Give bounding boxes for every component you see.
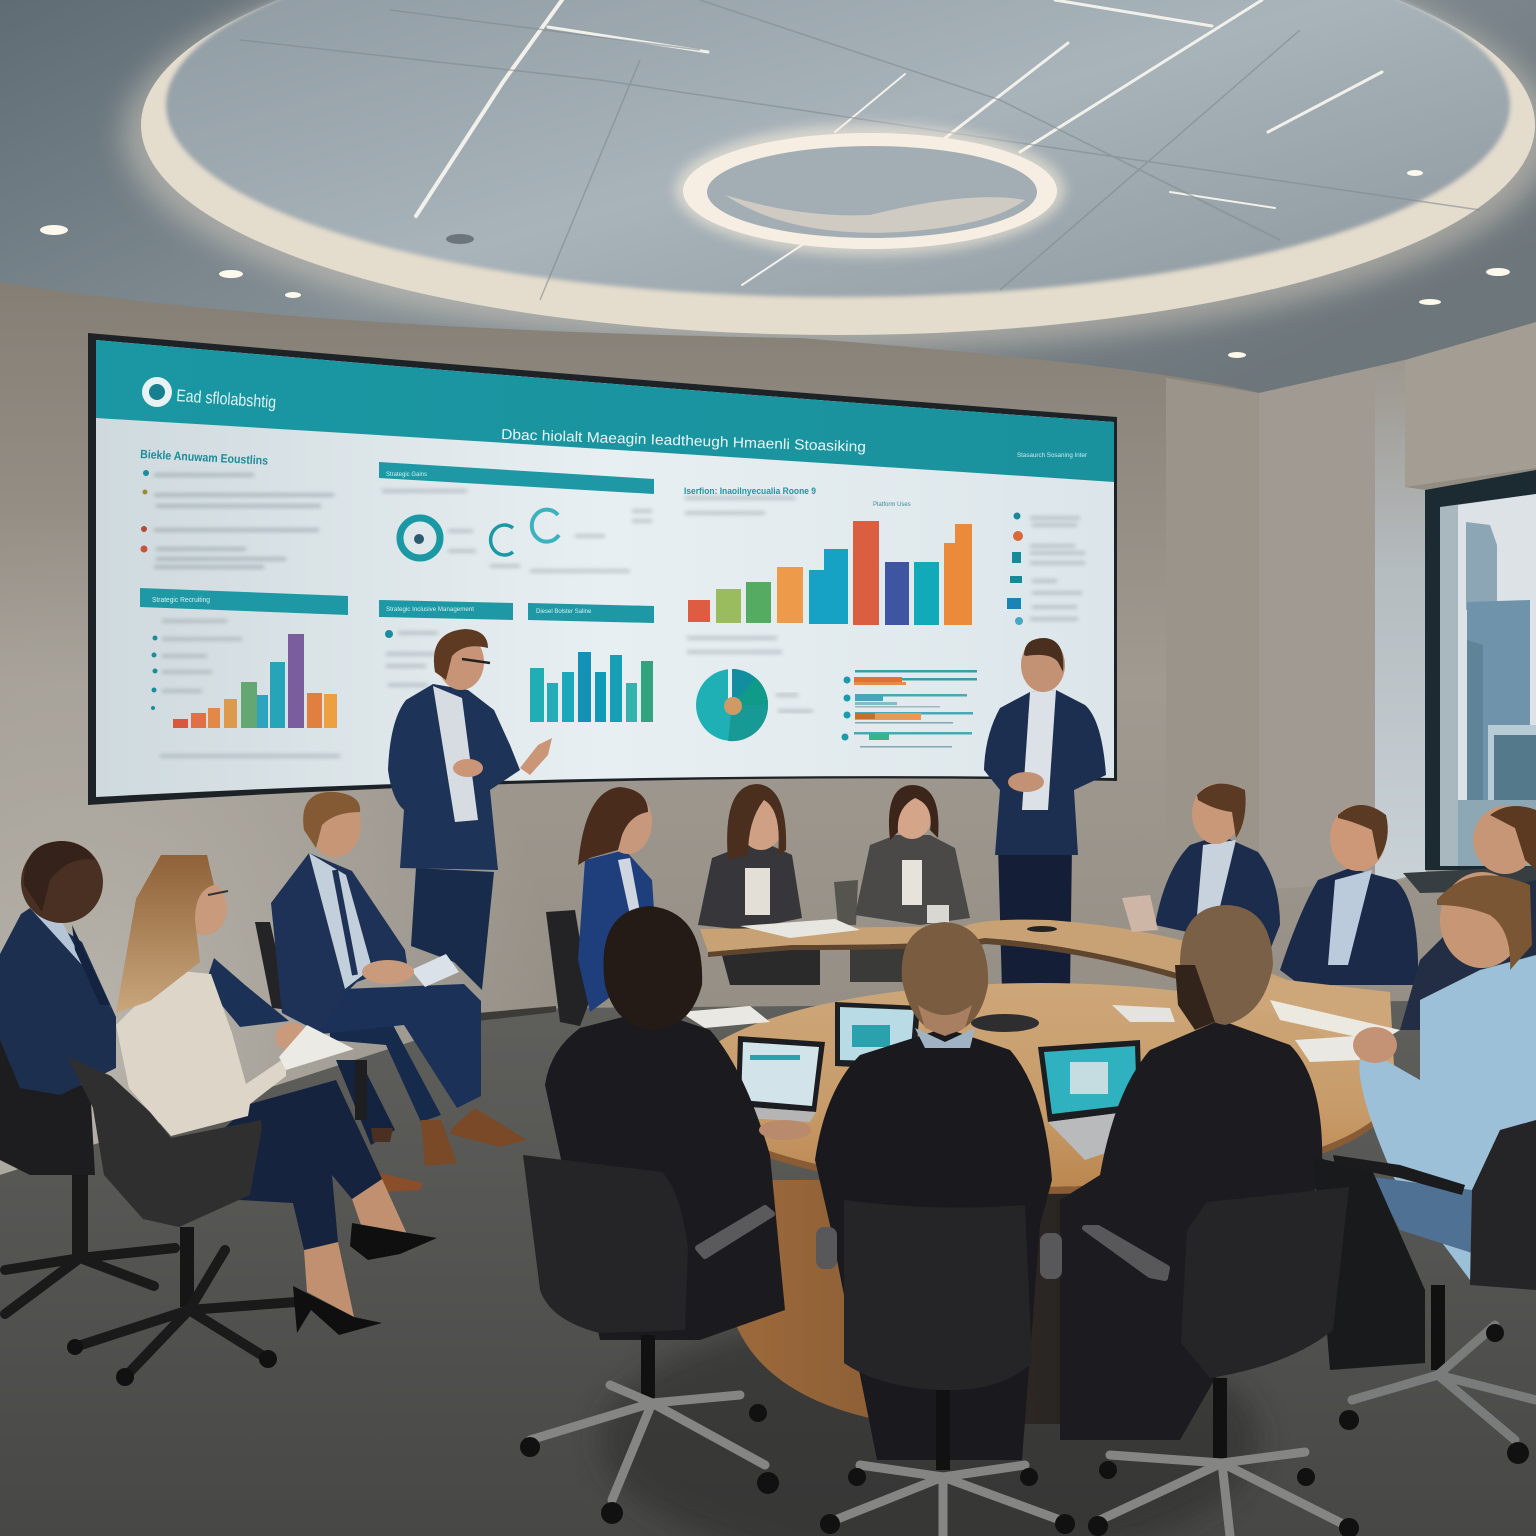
woman face (183, 881, 227, 935)
back table (700, 919, 1300, 1000)
skirting (478, 1006, 556, 1021)
legs dark (1313, 1157, 1425, 1370)
man at far left (0, 841, 289, 1314)
left chart bullets (151, 636, 158, 710)
left chart banner text: Strategic Recruiting (152, 597, 210, 604)
mug (927, 905, 949, 923)
laptop one (736, 1036, 825, 1122)
presenter right hands (1008, 772, 1044, 792)
woman shoes (350, 1223, 437, 1260)
donuts banner (379, 462, 654, 494)
table speaker (971, 1014, 1039, 1032)
chair right arm (1085, 1228, 1167, 1278)
presenter left glasses (462, 659, 490, 663)
presenter right shirt (1022, 690, 1056, 810)
seated woman one (578, 787, 655, 1012)
lower middle banner text: Strategic Inclusive Management (386, 607, 474, 613)
presenter right legs (998, 845, 1072, 990)
seated man chair (255, 922, 290, 1010)
hand (759, 1120, 811, 1140)
left bar chart (173, 634, 337, 728)
presenter left (388, 629, 552, 990)
pie chart (696, 669, 813, 741)
woman in cream blazer (67, 855, 437, 1386)
seated man shoes (450, 1108, 527, 1147)
left panel: notes (140, 447, 334, 568)
table papers (680, 1006, 770, 1028)
ceiling downlights (40, 170, 1510, 358)
teal bars (530, 652, 653, 722)
far left man body (0, 908, 116, 1095)
ceiling cove ring (141, 0, 1535, 335)
woman hand (275, 1023, 309, 1051)
third person shoes (376, 1172, 423, 1192)
left chart banner (140, 588, 348, 615)
horizontal bar chart (842, 670, 977, 748)
far left man head (21, 841, 103, 923)
laptops (736, 1002, 1158, 1160)
chair behind woman one (546, 910, 590, 1026)
laptop three (1038, 1040, 1158, 1160)
woman two legs (720, 948, 820, 985)
header small text right: Stasaurch Sosaning Inter (1017, 452, 1088, 459)
presenter left jacket (388, 684, 520, 870)
woman blazer (116, 970, 286, 1136)
ceiling soft light halo (123, 0, 1536, 350)
foreground person left (545, 906, 811, 1340)
presenter right jacket (984, 690, 1106, 855)
woman chair base (180, 1227, 194, 1307)
chair left (520, 1155, 779, 1524)
teal chart banner text: Diesel Bolster Saline (536, 609, 592, 615)
panel: teal bar chart (528, 603, 654, 722)
front table (680, 978, 1400, 1424)
woman three legs (850, 948, 905, 982)
window reveal (1375, 360, 1426, 885)
ceiling inner panel (166, 0, 1510, 297)
right wall column (1259, 360, 1405, 890)
header logo (142, 377, 172, 407)
presenter right head (1021, 638, 1065, 692)
header main title: Dbac hiolalt Maeagin Ieadtheugh Hmaenli Stoasiking (501, 427, 866, 456)
chair middle (816, 1200, 1075, 1536)
presenter left head (438, 634, 484, 690)
laptop two (835, 1002, 920, 1070)
table right extension (1180, 978, 1395, 1085)
seated man jacket (271, 853, 407, 1033)
panel: lower middle text (379, 600, 513, 686)
window soffit (1405, 322, 1536, 487)
presenter right (984, 638, 1106, 990)
woman legs skin (352, 1179, 407, 1234)
woman glasses (208, 891, 228, 895)
woman trousers (175, 1080, 382, 1250)
floor shadow (600, 1310, 1260, 1536)
floor (0, 1000, 1536, 1536)
window (1403, 470, 1536, 893)
back table phone (1027, 926, 1057, 932)
chair middle arms (816, 1227, 837, 1269)
woman hair (116, 855, 214, 1013)
laptop back (1122, 895, 1158, 932)
foreground person middle (815, 922, 1052, 1460)
right icon list (1007, 512, 1085, 625)
back table papers (740, 919, 860, 938)
main chart heading: Iserfion: Inaoilnyecualia Roone 9 (684, 486, 816, 497)
seated woman two (698, 784, 820, 985)
presenter left hair (434, 629, 488, 680)
ceiling centre light ring (675, 124, 1065, 256)
ceiling (0, 0, 1536, 420)
main chart sub heading: Platform Uses (873, 502, 911, 508)
seated man right two (1280, 805, 1418, 985)
seated man chair stem (355, 1060, 367, 1120)
woman chair (68, 1057, 262, 1227)
middle person head (902, 922, 988, 1035)
chair far right (1333, 1120, 1536, 1464)
panel: donuts (379, 462, 654, 572)
man in light blue shirt (1313, 872, 1536, 1370)
donut three (532, 510, 559, 542)
header company name: Ead sflolabshtig (176, 386, 277, 412)
presenter left shirt (433, 686, 478, 822)
seated woman three (850, 785, 970, 982)
donut two (491, 525, 513, 555)
seated man far right (1400, 806, 1536, 1030)
panel: main bar chart (684, 486, 972, 653)
presenter left hand (520, 738, 552, 775)
far left man arm (205, 958, 289, 1027)
screen header band (96, 340, 1114, 482)
table pedestal (728, 1180, 1100, 1424)
foreground chairs (520, 1120, 1536, 1536)
presentation screen (88, 333, 1117, 805)
chair left arm (698, 1208, 772, 1256)
back chairs (546, 880, 858, 1026)
panel: left chart (140, 588, 348, 757)
seated man paper (411, 954, 459, 987)
woman clipboard (279, 1025, 354, 1070)
lower middle banner (379, 600, 513, 620)
left panel heading: Biekle Anuwam Eoustlins (140, 447, 269, 468)
presenter right hair (1024, 638, 1063, 672)
blue trousers (1372, 1177, 1472, 1253)
chair right (1085, 1187, 1359, 1536)
seated man front leg (320, 984, 481, 1108)
foreground person right (1060, 905, 1322, 1440)
seated man back leg (330, 1020, 441, 1122)
chair behind woman three (834, 880, 858, 925)
table top (685, 983, 1395, 1187)
seated man left (255, 792, 527, 1192)
ceiling light lines (416, 0, 1382, 285)
donut one (400, 518, 440, 558)
donuts banner text: Strategic Gains (386, 472, 427, 478)
presenter left legs (411, 868, 494, 990)
seated man right one (1122, 784, 1280, 950)
far left chair (0, 1035, 95, 1175)
ceiling panel seams (240, 0, 1480, 300)
teal chart banner (528, 603, 654, 623)
left man legs behind (336, 1060, 395, 1145)
main bars (688, 521, 972, 625)
left panel bullet dots (140, 470, 149, 552)
